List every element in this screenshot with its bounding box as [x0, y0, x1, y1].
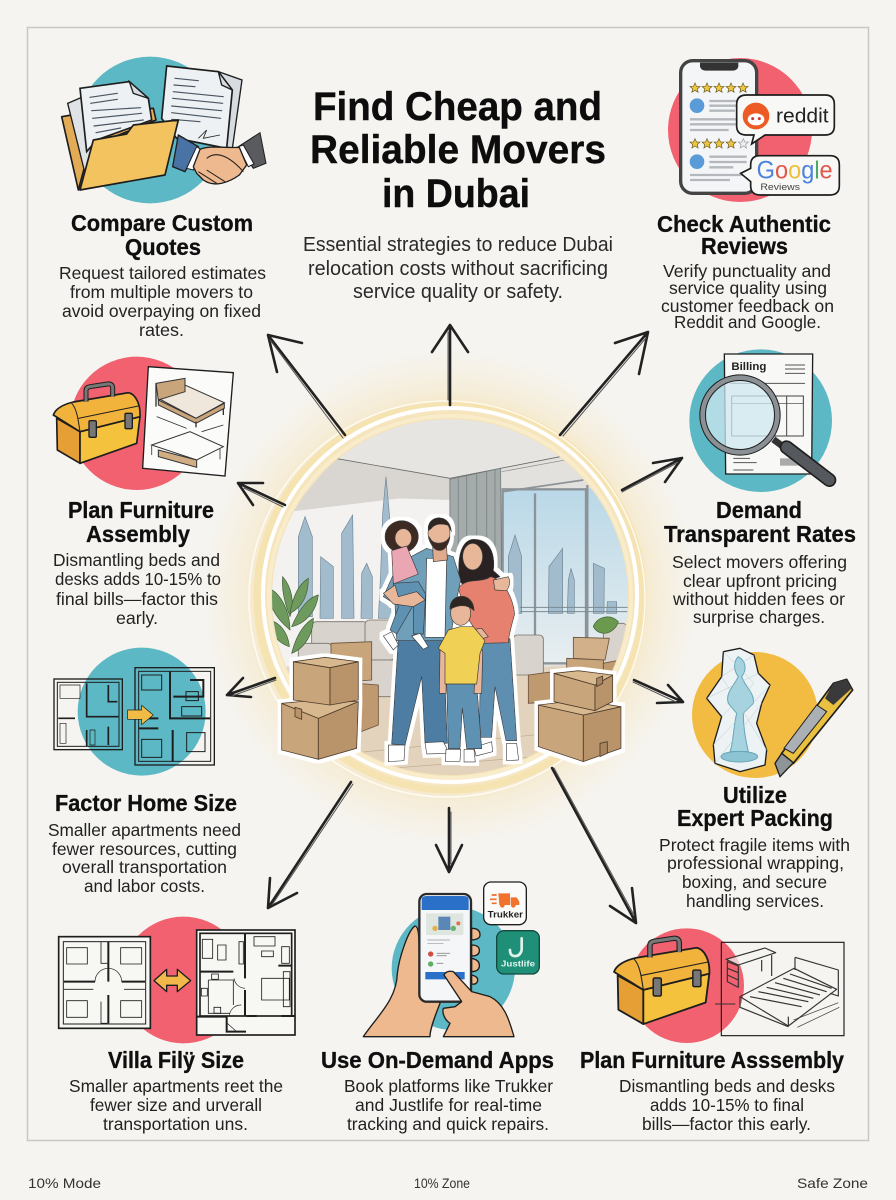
heading: Assembly [86, 521, 190, 547]
icon: hand holding phone and app tiles [363, 882, 539, 1037]
subtitle: Essential strategies to reduce Dubai [303, 234, 613, 256]
description: Dismantling beds and desks [619, 1076, 835, 1096]
description [48, 820, 241, 896]
heading: Transparent Rates [664, 521, 856, 547]
description: Select movers offering [672, 552, 847, 572]
description: desks adds 10-15% to [55, 569, 221, 589]
heading [664, 497, 856, 547]
skyline towers [298, 477, 617, 618]
heading: Factor Home Size [55, 790, 237, 816]
description: avoid overpaying on fixed [62, 301, 261, 321]
description [69, 1076, 283, 1134]
description [672, 552, 847, 627]
panel: check authentic reviews [657, 58, 839, 332]
heading: Check Authentic [657, 211, 831, 237]
panel: plan furniture assembly [53, 357, 233, 628]
arrow: to plan furniture [238, 483, 285, 507]
heading [677, 782, 833, 831]
description [344, 1076, 553, 1134]
icon: wrapped statue and box cutter [692, 648, 853, 778]
arrow: to title [432, 325, 468, 405]
icon: hand holding phone and app tiles: Justlife [501, 959, 535, 969]
cardboard boxes right [538, 671, 621, 762]
heading [71, 210, 253, 260]
description [619, 1076, 835, 1134]
title [310, 85, 606, 216]
subtitle: service quality or safety. [353, 281, 563, 303]
arrow: to check reviews [560, 332, 648, 436]
description: without hidden fees or [672, 589, 845, 609]
description: and Justlife for real-time [355, 1095, 542, 1115]
description [659, 835, 850, 911]
description [661, 261, 834, 332]
woman [458, 539, 519, 761]
description: Smaller apartments reet the [69, 1076, 283, 1096]
title: in Dubai [382, 172, 530, 216]
window [503, 488, 629, 663]
description: Reddit and Google. [674, 312, 821, 332]
title: Find Cheap and [313, 85, 602, 129]
central glow [200, 347, 700, 847]
description: final bills—factor this [56, 589, 218, 609]
heading: Plan Furniture Asssembly [580, 1047, 844, 1073]
description: transportation uns. [103, 1114, 248, 1134]
panel: plan furniture assembly, bottom [580, 928, 844, 1134]
description: handling services. [686, 891, 824, 911]
background boxes [331, 637, 620, 733]
arrow: to expert packing [633, 680, 683, 703]
icon: magnifier over bill [689, 349, 832, 492]
arrow: to factor home size [227, 678, 276, 697]
icon: folder and handshake [62, 57, 266, 203]
arrow: to villa size [268, 782, 353, 908]
heading: Utilize [723, 782, 787, 808]
central illustration: apartment interior [272, 419, 628, 775]
panel: villa size [59, 917, 295, 1134]
heading: Villa Filÿ Size [108, 1047, 244, 1073]
panel: use on-demand apps [321, 882, 554, 1134]
footer: Safe Zone [797, 1175, 868, 1191]
icon: small to larger floor plan [54, 648, 214, 776]
description [59, 263, 266, 340]
description: Book platforms like Trukker [344, 1076, 553, 1096]
description: customer feedback on [661, 296, 834, 316]
description: professional wrapping, [667, 853, 844, 873]
girl [383, 521, 428, 650]
sofa [298, 620, 627, 697]
footer [28, 1175, 868, 1191]
man [383, 518, 461, 762]
plant [268, 577, 618, 653]
arrow: to bottom furniture [552, 768, 636, 923]
panel: utilize expert packing [659, 648, 853, 911]
icon: hand holding phone and app tiles: Trukker [488, 909, 524, 919]
description: Request tailored estimates [59, 263, 266, 283]
description: surprise charges. [693, 607, 825, 627]
subtitle [303, 234, 613, 303]
floor [360, 666, 566, 775]
description: boxing, and secure [682, 872, 827, 892]
icon: magnifier over bill: Billing [731, 361, 766, 373]
arrow: to demand rates [622, 458, 682, 492]
heading: Use On-Demand Apps [321, 1047, 554, 1073]
boy [438, 596, 485, 762]
description: tracking and quick repairs. [347, 1114, 549, 1134]
heading: Reviews [701, 233, 788, 259]
description: Smaller apartments need [48, 820, 241, 840]
description: Dismantling beds and [53, 550, 220, 570]
description: fewer resources, cutting [52, 839, 237, 859]
description: service quality using [669, 278, 827, 298]
family [383, 518, 519, 762]
panel: factor home size [48, 648, 241, 896]
heading: Compare Custom [71, 210, 253, 236]
icon: phone with review bubbles: reddit [776, 105, 829, 127]
description: and labor costs. [84, 876, 205, 896]
footer: 10% Zone [414, 1175, 470, 1191]
central rings [249, 401, 645, 797]
footer: 10% Mode [28, 1175, 101, 1191]
description [53, 550, 221, 628]
icon: phone with review bubbles [668, 58, 839, 202]
description: early. [116, 608, 158, 628]
heading [657, 211, 831, 259]
description: clear upfront pricing [683, 571, 837, 591]
window frames [503, 485, 587, 663]
arrow: to compare quotes [268, 335, 345, 438]
icon: villa and apartment floor plans [59, 917, 295, 1043]
description: Verify punctuality and [663, 261, 831, 281]
icon: toolbox with desk and bed frame [614, 928, 844, 1043]
description: from multiple movers to [70, 282, 253, 302]
description: overall transportation [62, 857, 227, 877]
title: Reliable Movers [310, 128, 606, 172]
cardboard boxes left [282, 657, 358, 759]
description: Protect fragile items with [659, 835, 850, 855]
icon: toolbox and bed instructions [53, 357, 233, 490]
description: rates. [139, 320, 184, 340]
description: adds 10-15% to final [650, 1095, 804, 1115]
heading: Demand [716, 497, 802, 523]
description: bills—factor this early. [642, 1114, 811, 1134]
heading: Quotes [125, 234, 201, 260]
arrow: to on-demand apps [436, 808, 462, 872]
heading: Expert Packing [677, 805, 833, 831]
icon: phone with review bubbles: Google [757, 158, 833, 185]
panel: demand transparent rates [664, 349, 856, 627]
heading: Plan Furniture [68, 497, 214, 523]
curtain [450, 468, 502, 571]
panel: compare custom quotes [59, 57, 266, 340]
subtitle: relocation costs without sacrificing [308, 258, 608, 280]
icon: phone with review bubbles: Reviews [760, 182, 801, 192]
heading [68, 497, 214, 547]
description: fewer size and urverall [90, 1095, 262, 1115]
